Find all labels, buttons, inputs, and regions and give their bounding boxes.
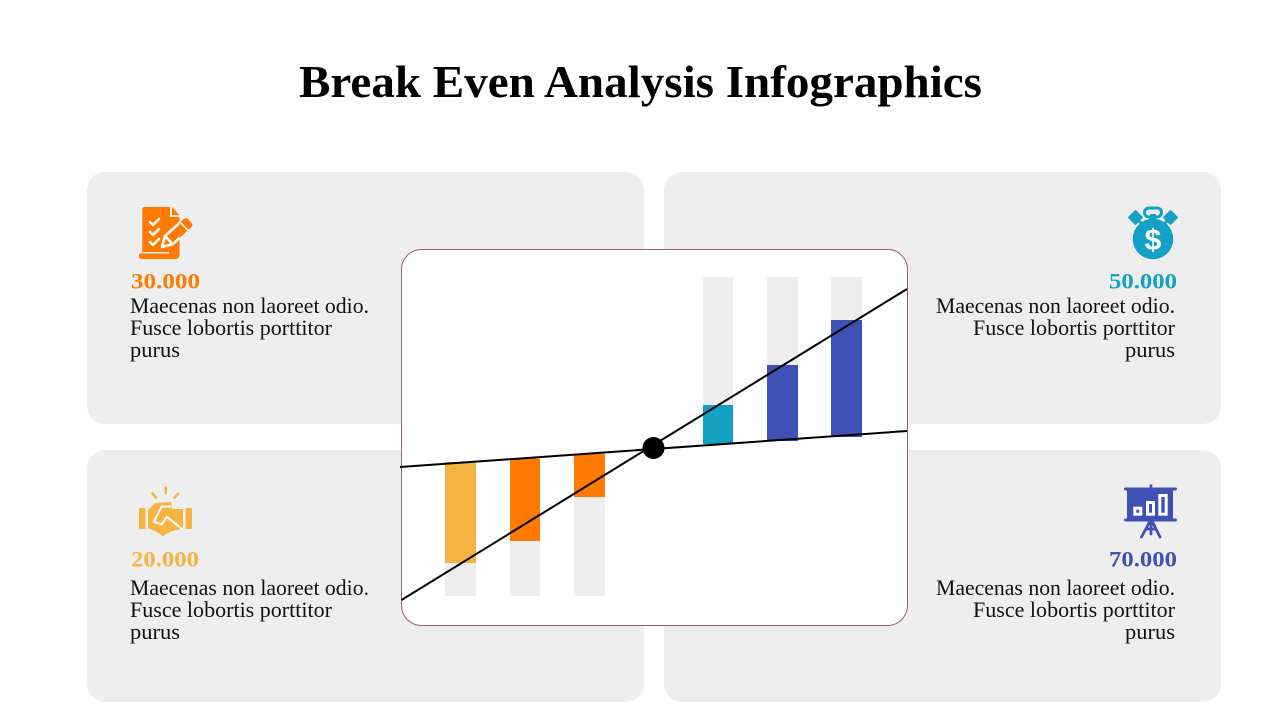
text block: Fusce lobortis porttitor [973,315,1176,340]
value: 70.000: 70.000 [1109,547,1177,572]
bar 2 [510,458,540,596]
bar 5 [767,277,798,441]
icon: handshake [139,488,192,536]
text block: purus [1125,337,1175,362]
value: 20.000: 20.000 [131,547,199,572]
text block: Maecenas non laoreet odio. [936,293,1175,318]
text block [936,293,1176,362]
text block: Fusce lobortis porttitor [130,315,333,340]
text block [130,293,369,362]
text block: Maecenas non laoreet odio. [936,575,1175,600]
text block: Fusce lobortis porttitor [130,597,333,622]
panel: top right [664,172,1221,424]
bar 1 [445,462,476,596]
icon: checklist and pencil [139,207,192,259]
bar 6 [831,277,862,437]
text block [936,575,1176,644]
panel: bottom right [664,450,1221,702]
bar 3 [574,454,605,596]
title: Break Even Analysis Infographics [299,56,982,107]
value: 30.000: 30.000 [131,269,200,294]
panel: break-even chart [400,250,908,626]
text block: purus [130,337,180,362]
break-even point [642,437,664,459]
text block: purus [1125,619,1175,644]
bar 4 [703,277,733,444]
text block: Maecenas non laoreet odio. [130,575,369,600]
line: fixed cost [400,431,907,467]
text block: Maecenas non laoreet odio. [130,293,369,318]
icon: money stopwatch: $ [1145,224,1162,257]
text block: purus [130,619,180,644]
value: 50.000: 50.000 [1109,269,1177,294]
text block: Fusce lobortis porttitor [973,597,1176,622]
icon: money stopwatch [1128,208,1178,259]
line: revenue [402,289,907,600]
icon: presentation board [1124,484,1177,537]
text block [130,575,369,644]
panel: top left [87,172,644,424]
panel: bottom left [87,450,644,702]
